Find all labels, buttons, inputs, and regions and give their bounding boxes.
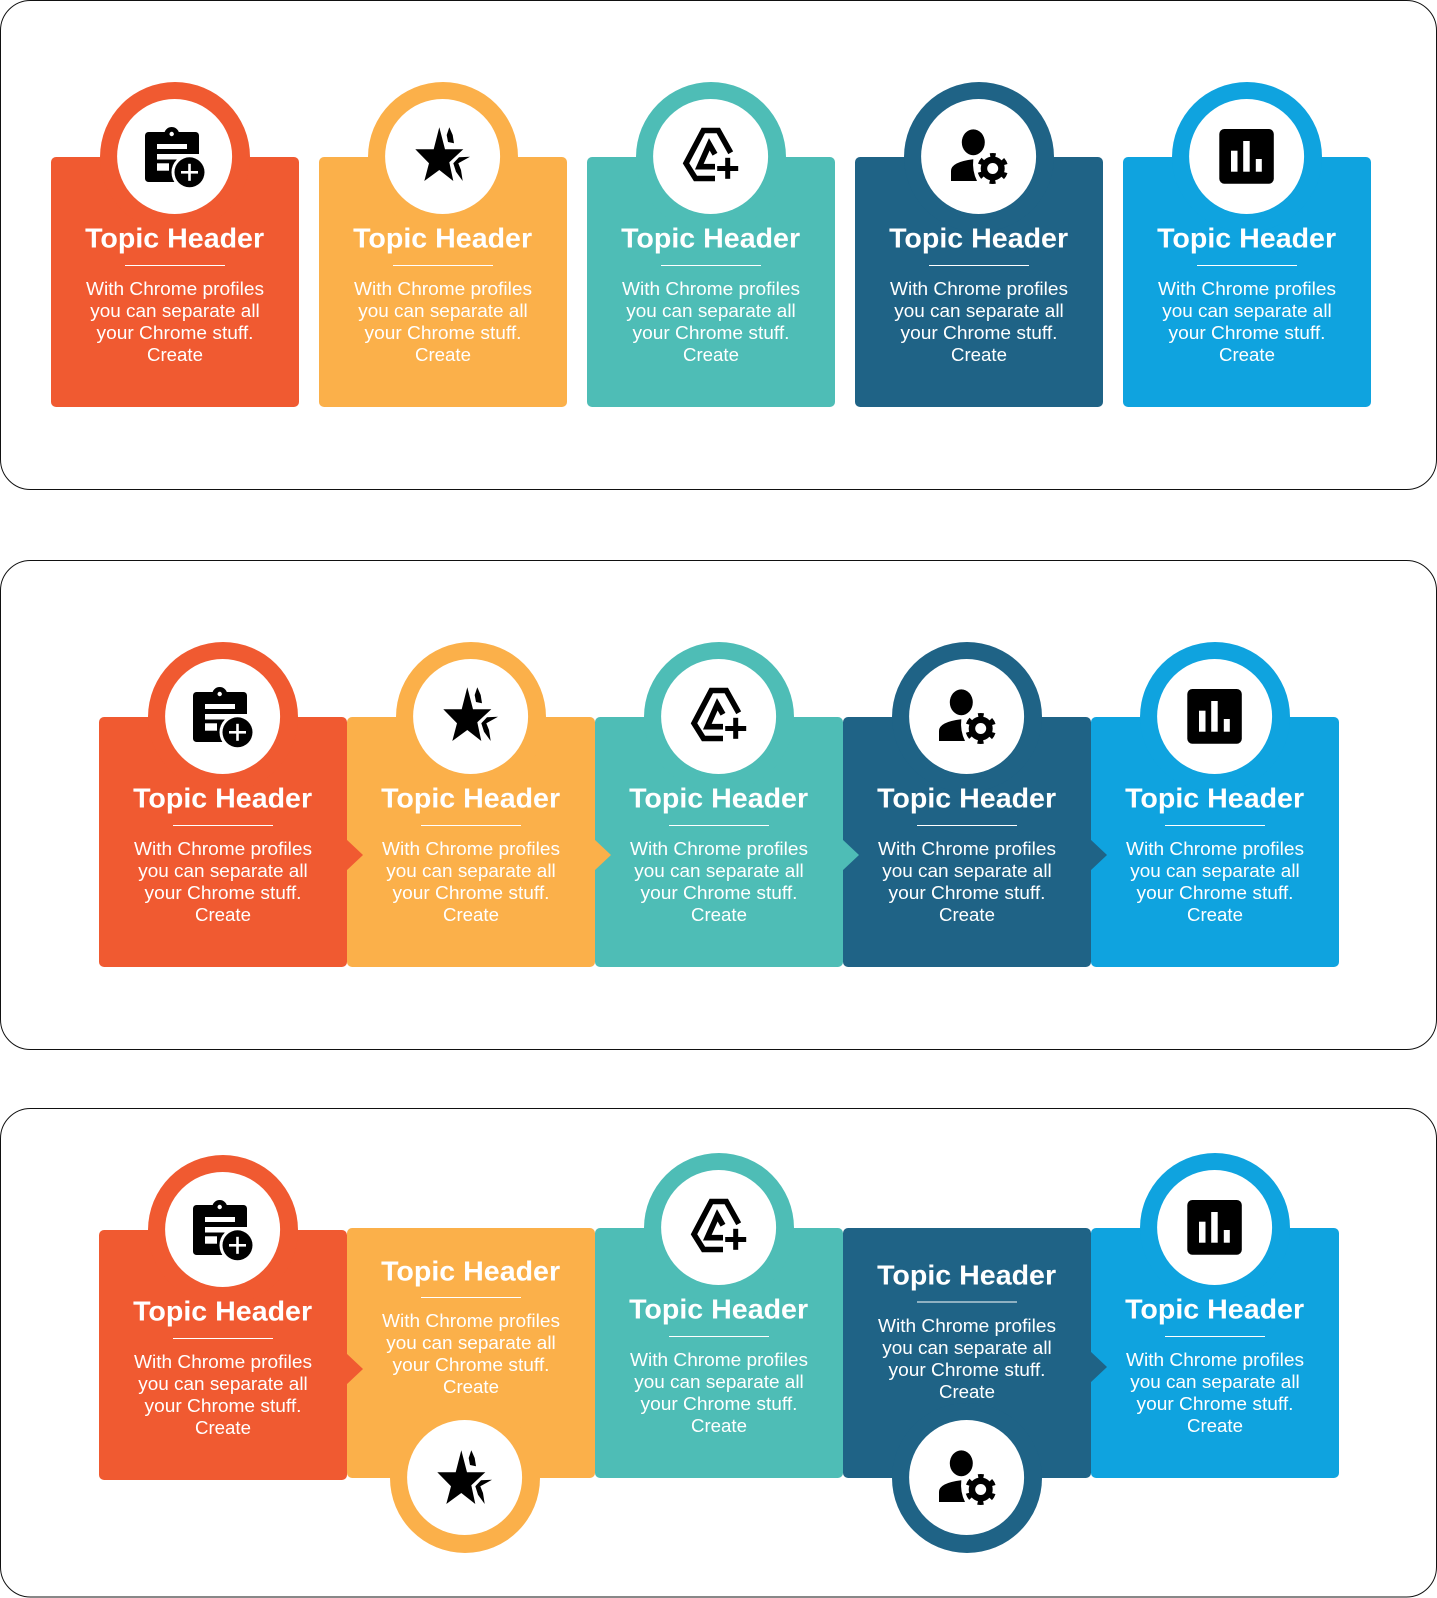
body text: Create (1187, 905, 1243, 925)
heading: Topic Header (133, 783, 312, 814)
heading: Topic Header (85, 223, 264, 254)
heading: Topic Header (629, 1294, 808, 1325)
icon: hexagon plus (694, 1202, 746, 1250)
body text: your Chrome stuff. (1168, 323, 1326, 343)
heading: Topic Header (629, 783, 808, 814)
panel: row 2, joined cards with arrows (0, 560, 1436, 1050)
body text: With Chrome profiles (382, 1311, 560, 1331)
white icon disc (165, 659, 280, 774)
divider (917, 1302, 1017, 1303)
card shape with ring (595, 1153, 843, 1478)
card shape with ring (347, 642, 595, 967)
white icon disc (653, 99, 768, 214)
body text: your Chrome stuff. (144, 1396, 302, 1416)
body text: Create (195, 1418, 251, 1438)
body text: your Chrome stuff. (900, 323, 1058, 343)
icon: broken star (437, 1450, 492, 1504)
arrow: card 1 to card 2 (346, 1353, 363, 1385)
body text (354, 279, 532, 365)
icon: hexagon plus (686, 130, 738, 179)
body text: Create (443, 905, 499, 925)
card shape with ring (1123, 82, 1371, 407)
white icon disc (117, 99, 232, 214)
icon: user with gear (939, 1450, 994, 1503)
body text (630, 1350, 808, 1436)
body text: you can separate all (386, 1333, 556, 1353)
card shape with ring (843, 1228, 1091, 1553)
white icon disc (165, 1172, 280, 1287)
body text: Create (939, 905, 995, 925)
heading: Topic Header (1157, 223, 1336, 254)
body text: your Chrome stuff. (1136, 1394, 1294, 1414)
card 2: amber star (319, 82, 567, 407)
body text: you can separate all (90, 301, 260, 321)
body text: your Chrome stuff. (392, 1355, 550, 1375)
body text: your Chrome stuff. (640, 883, 798, 903)
heading: Topic Header (889, 223, 1068, 254)
white icon disc (1189, 99, 1304, 214)
panel: row 3, alternating cards (0, 1108, 1436, 1597)
icon: bar chart square (1187, 689, 1242, 744)
divider (669, 825, 769, 826)
body text: your Chrome stuff. (144, 883, 302, 903)
body text: With Chrome profiles (1158, 279, 1336, 299)
body text: you can separate all (1130, 1372, 1300, 1392)
panel: row 1, separated cards (0, 0, 1436, 490)
body text: With Chrome profiles (630, 839, 808, 859)
heading: Topic Header (877, 1260, 1056, 1291)
divider (661, 265, 761, 266)
icon: broken star (443, 687, 498, 741)
body text: you can separate all (882, 1338, 1052, 1358)
panel frame (0, 0, 1436, 490)
white icon disc (385, 99, 500, 214)
body text: Create (1219, 345, 1275, 365)
card 5: blue chart (1091, 1153, 1339, 1478)
heading: Topic Header (1125, 1294, 1304, 1325)
divider (929, 265, 1029, 266)
card 3: teal hexagon (587, 82, 835, 407)
white icon disc (1157, 659, 1272, 774)
white icon disc (661, 1170, 776, 1285)
card 3: teal hexagon (595, 1153, 843, 1478)
arrow: card 2 to card 3 (594, 839, 611, 871)
body text: With Chrome profiles (1126, 1350, 1304, 1370)
body text: Create (691, 905, 747, 925)
body text: you can separate all (634, 1372, 804, 1392)
body text: Create (443, 1377, 499, 1397)
icon: bar chart square (1187, 1200, 1242, 1255)
body text: With Chrome profiles (878, 1316, 1056, 1336)
card 1: red clipboard (99, 1155, 347, 1480)
body text: you can separate all (386, 861, 556, 881)
panel frame (0, 1108, 1436, 1597)
body text (86, 279, 264, 365)
body text: your Chrome stuff. (632, 323, 790, 343)
divider (669, 1336, 769, 1337)
body text (382, 839, 560, 925)
body text (1126, 1350, 1304, 1436)
body text: With Chrome profiles (630, 1350, 808, 1370)
card 5: blue chart (1123, 82, 1371, 407)
icon: clipboard plus (193, 1200, 256, 1263)
card 4: navy user settings (855, 82, 1103, 407)
heading: Topic Header (133, 1296, 312, 1327)
card 1: red clipboard (51, 82, 299, 407)
arrow: card 4 to card 5 (1090, 1351, 1107, 1383)
body text: your Chrome stuff. (888, 883, 1046, 903)
divider (421, 1297, 521, 1298)
heading: Topic Header (621, 223, 800, 254)
card shape with ring (99, 642, 347, 967)
body text: you can separate all (138, 1374, 308, 1394)
body text: your Chrome stuff. (888, 1360, 1046, 1380)
body text: With Chrome profiles (134, 1352, 312, 1372)
body text: your Chrome stuff. (392, 883, 550, 903)
card shape with ring (855, 82, 1103, 407)
divider (1165, 825, 1265, 826)
card shape with ring (587, 82, 835, 407)
body text: Create (415, 345, 471, 365)
white icon disc (413, 659, 528, 774)
card shape with ring (1091, 642, 1339, 967)
white icon disc (921, 99, 1036, 214)
divider (173, 825, 273, 826)
card 4: navy user settings (843, 642, 1091, 967)
body text (1126, 839, 1304, 925)
panel frame (0, 560, 1436, 1050)
icon: user with gear (939, 689, 994, 742)
white icon disc (661, 659, 776, 774)
divider (1197, 265, 1297, 266)
icon: clipboard plus (145, 127, 208, 190)
body text: you can separate all (634, 861, 804, 881)
card 3: teal hexagon (595, 642, 843, 967)
body text: Create (951, 345, 1007, 365)
heading: Topic Header (381, 783, 560, 814)
body text: With Chrome profiles (134, 839, 312, 859)
card shape with ring (843, 642, 1091, 967)
body text: you can separate all (1162, 301, 1332, 321)
card 2: amber star, icon below (347, 1228, 595, 1553)
body text: you can separate all (626, 301, 796, 321)
divider (1165, 1336, 1265, 1337)
body text (1158, 279, 1336, 365)
body text (890, 279, 1068, 365)
body text: Create (1187, 1416, 1243, 1436)
card shape with ring (51, 82, 299, 407)
body text: Create (683, 345, 739, 365)
icon: broken star (415, 127, 470, 181)
card shape with ring (595, 642, 843, 967)
body text: With Chrome profiles (354, 279, 532, 299)
card shape with ring (319, 82, 567, 407)
divider (421, 825, 521, 826)
body text: you can separate all (882, 861, 1052, 881)
body text: you can separate all (138, 861, 308, 881)
white icon disc (909, 1420, 1024, 1535)
heading: Topic Header (1125, 783, 1304, 814)
body text: With Chrome profiles (878, 839, 1056, 859)
card shape with ring (99, 1155, 347, 1480)
icon: clipboard plus (193, 687, 256, 750)
body text: your Chrome stuff. (96, 323, 254, 343)
body text (134, 1352, 312, 1438)
divider (917, 825, 1017, 826)
icon: user with gear (951, 129, 1006, 182)
divider (393, 265, 493, 266)
body text: your Chrome stuff. (364, 323, 522, 343)
arrow: card 4 to card 5 (1090, 839, 1107, 871)
body text: Create (691, 1416, 747, 1436)
body text: you can separate all (894, 301, 1064, 321)
body text: Create (147, 345, 203, 365)
body text (878, 1316, 1056, 1402)
body text: With Chrome profiles (890, 279, 1068, 299)
white icon disc (407, 1420, 522, 1535)
card 4: navy user settings, icon below (843, 1228, 1091, 1553)
body text: With Chrome profiles (382, 839, 560, 859)
body text (622, 279, 800, 365)
icon: hexagon plus (694, 690, 746, 739)
body text: you can separate all (358, 301, 528, 321)
body text: With Chrome profiles (622, 279, 800, 299)
divider (173, 1338, 273, 1339)
arrow: card 1 to card 2 (346, 839, 363, 871)
card 1: red clipboard (99, 642, 347, 967)
body text: your Chrome stuff. (1136, 883, 1294, 903)
body text: Create (195, 905, 251, 925)
white icon disc (1157, 1170, 1272, 1285)
body text: With Chrome profiles (1126, 839, 1304, 859)
body text (878, 839, 1056, 925)
card shape with ring (1091, 1153, 1339, 1478)
icon: bar chart square (1219, 129, 1274, 184)
heading: Topic Header (353, 223, 532, 254)
body text: your Chrome stuff. (640, 1394, 798, 1414)
arrow: card 3 to card 4 (842, 839, 859, 871)
body text: With Chrome profiles (86, 279, 264, 299)
heading: Topic Header (381, 1256, 560, 1287)
body text (382, 1311, 560, 1397)
card 2: amber star (347, 642, 595, 967)
body text (134, 839, 312, 925)
body text: Create (939, 1382, 995, 1402)
white icon disc (909, 659, 1024, 774)
card shape with ring (347, 1228, 595, 1553)
card 5: blue chart (1091, 642, 1339, 967)
body text: you can separate all (1130, 861, 1300, 881)
divider (125, 265, 225, 266)
body text (630, 839, 808, 925)
heading: Topic Header (877, 783, 1056, 814)
